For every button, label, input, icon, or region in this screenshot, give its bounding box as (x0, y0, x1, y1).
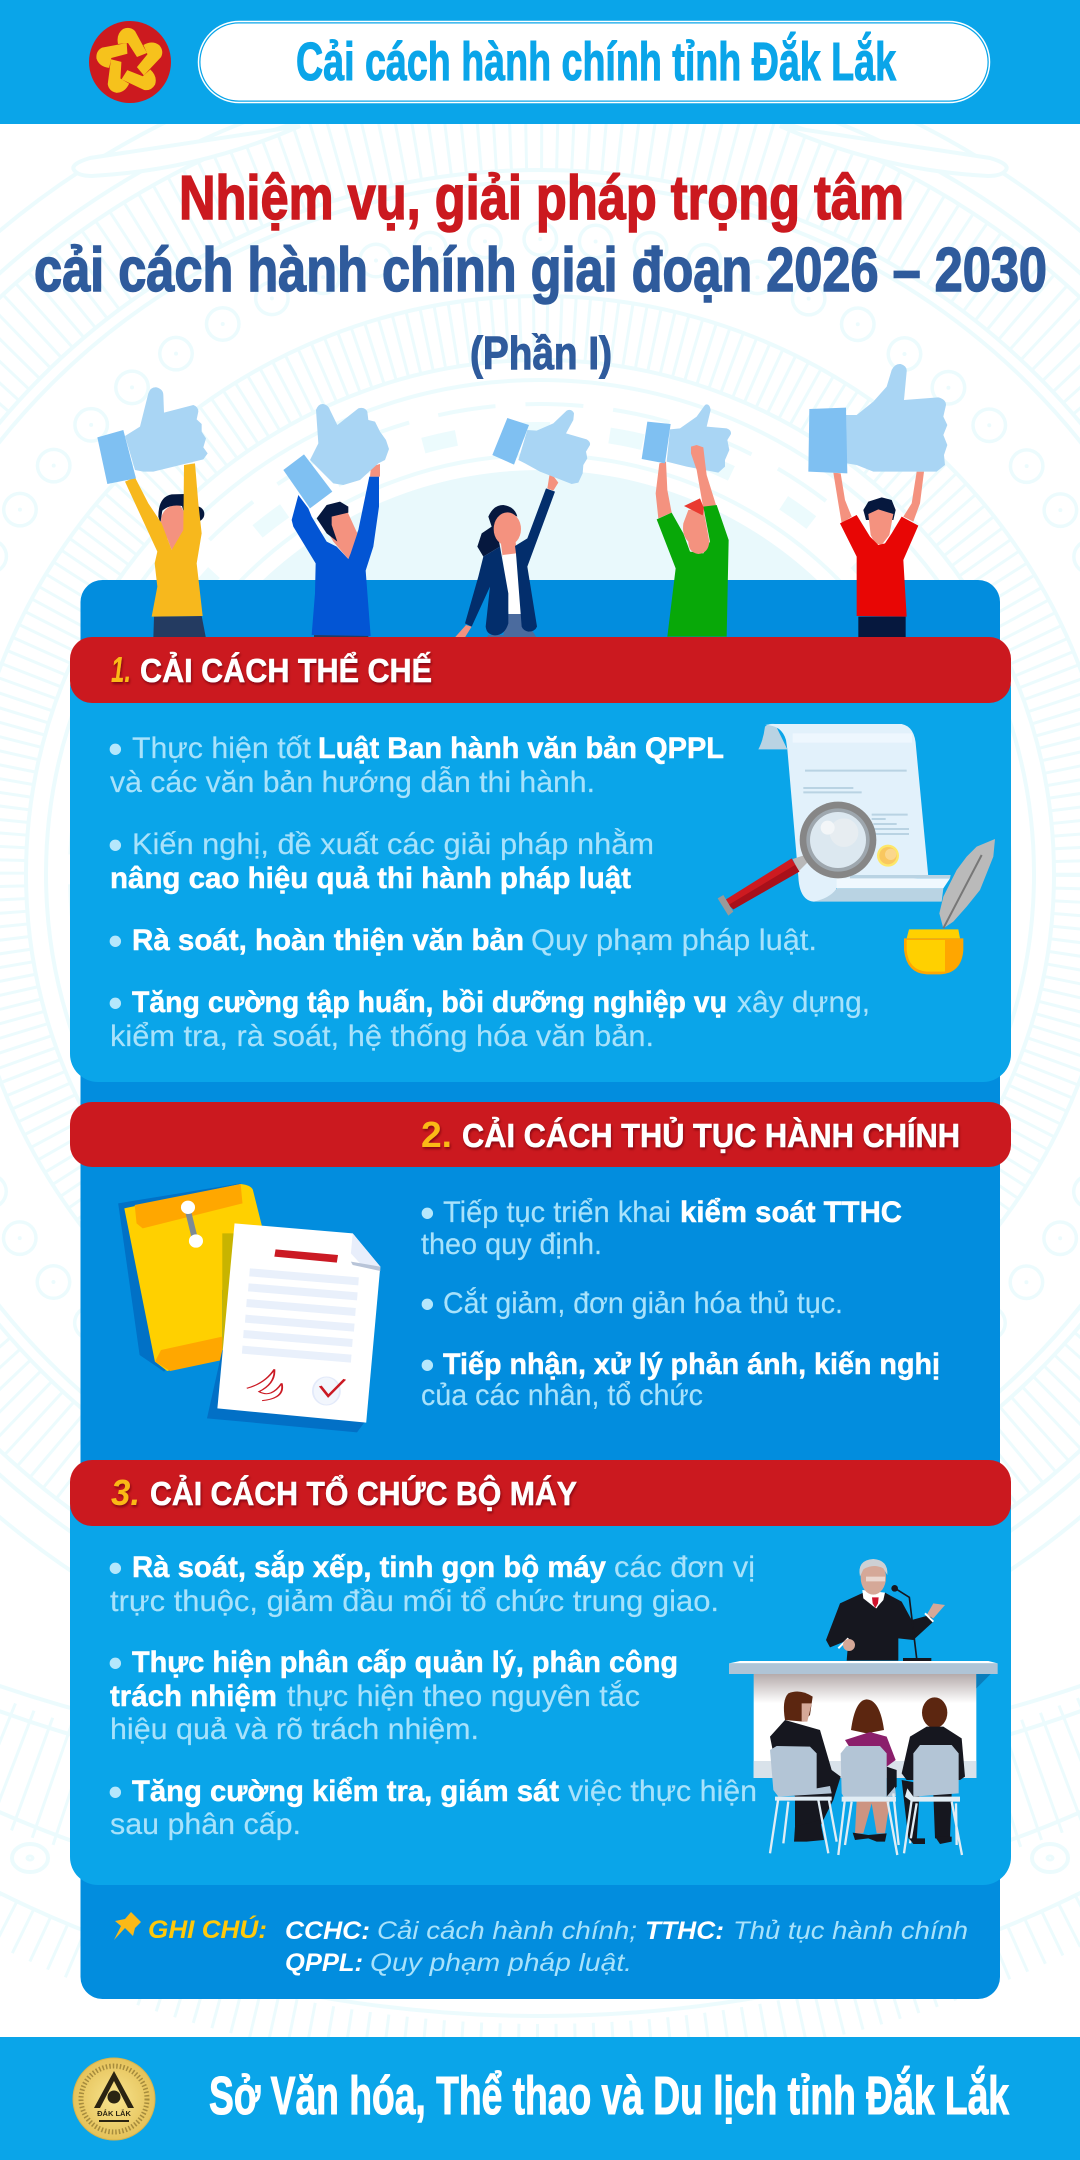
section 1 text: nâng cao hiệu quả thi hành pháp luật (110, 862, 631, 895)
panel: section 3 (70, 1460, 1011, 1885)
section 1 text: • (108, 821, 123, 868)
section 2 text: • (420, 1189, 435, 1236)
note text: Quy phạm pháp luật. (370, 1949, 632, 1977)
note text: Thủ tục hành chính (733, 1917, 968, 1945)
section 2 text: theo quy định. (421, 1228, 602, 1261)
section 3 heading: 3. (111, 1472, 140, 1513)
icon: envelope and signed document (118, 1183, 380, 1432)
header pill (198, 22, 990, 102)
section 2 heading: CẢI CÁCH THỦ TỤC HÀNH CHÍNH (462, 1117, 960, 1154)
icon: Dak Lak tourism seal (73, 2058, 155, 2140)
section 1 card background (70, 660, 1011, 1082)
section 3 text: • (108, 1639, 123, 1686)
section 1 text: xây dựng, (737, 986, 870, 1019)
section 2 text: • (420, 1341, 435, 1388)
note text (285, 1917, 968, 1977)
section 3 text: Tăng cường kiểm tra, giám sát (132, 1775, 559, 1808)
section 1 text: và các văn bản hướng dẫn thi hành. (110, 766, 595, 799)
section 3 text: trực thuộc, giảm đầu mối tổ chức trung giao. (110, 1585, 719, 1618)
note text: TTHC: (645, 1917, 724, 1945)
icon: speaker at podium and seated audience (729, 1559, 998, 1855)
section 3 text: Thực hiện phân cấp quản lý, phân công (132, 1646, 678, 1679)
section 1 text: Quy phạm pháp luật. (531, 924, 817, 957)
section 1 text: Rà soát, hoàn thiện văn bản (132, 924, 524, 957)
section 3 text: Rà soát, sắp xếp, tinh gọn bộ máy (132, 1550, 606, 1584)
section 2 text: của các nhân, tổ chức (421, 1379, 703, 1412)
section 1 text (108, 725, 870, 1053)
section 1 heading: CẢI CÁCH THỂ CHẾ (140, 652, 432, 689)
section 1 text: Thực hiện tốt (132, 732, 312, 765)
person 1: yellow sweater (97, 387, 208, 638)
person 2: blue jacket (283, 404, 389, 638)
section 1 text: • (108, 725, 123, 772)
section 3 text (108, 1544, 757, 1841)
main blue panel (80, 580, 1000, 1999)
section 3 text: trách nhiệm (110, 1680, 277, 1713)
section 2 text: Tiếp tục triển khai (443, 1196, 671, 1229)
note label: GHI CHÚ: (148, 1915, 267, 1944)
audience member 2 (838, 1699, 899, 1855)
person 5: red t-shirt (808, 364, 947, 638)
section 1 text: • (108, 917, 123, 964)
section 3 text: • (108, 1544, 123, 1591)
header bar (0, 0, 1080, 124)
note text: QPPL: (285, 1949, 363, 1977)
section 1 text: • (108, 979, 123, 1026)
section 1 text: Kiến nghị, đề xuất các giải pháp nhằm (132, 828, 654, 861)
icon: pushpin (114, 1912, 141, 1940)
person 4: green shirt (642, 404, 731, 637)
person 3: navy blazer (455, 410, 590, 638)
note block (114, 1912, 968, 1977)
panel: section 2 (70, 1102, 1011, 1432)
section 3 heading: CẢI CÁCH TỔ CHỨC BỘ MÁY (150, 1474, 577, 1512)
title (34, 164, 1047, 379)
section 3 text: sau phân cấp. (110, 1808, 301, 1841)
icon: provincial reform emblem (89, 21, 171, 103)
audience member 3 (902, 1697, 965, 1855)
section 3 text: các đơn vị (614, 1551, 755, 1584)
section 2 heading: 2. (421, 1114, 452, 1155)
footer bar (0, 2037, 1080, 2160)
section 3 text: việc thực hiện (568, 1775, 757, 1808)
audience member 1 (770, 1691, 841, 1853)
icon: scroll, magnifier, quill and ink pot (718, 724, 995, 974)
section 2 text: • (420, 1280, 435, 1327)
section 3 heading (70, 1460, 1011, 1526)
section 2 text: Cắt giảm, đơn giản hóa thủ tục. (443, 1287, 843, 1320)
section 2 text: Tiếp nhận, xử lý phản ánh, kiến nghị (443, 1348, 940, 1381)
panel: section 1 (70, 637, 1011, 1082)
section 2 heading (70, 1102, 1011, 1167)
section 3 text: • (108, 1768, 123, 1815)
section 1 heading: 1. (111, 649, 131, 690)
section 1 text: Luật Ban hành văn bản QPPL (318, 732, 724, 765)
title: (Phần I) (470, 327, 612, 379)
note text: CCHC: (285, 1917, 370, 1945)
section 2 text: kiểm soát TTHC (680, 1196, 902, 1229)
section 2 text (420, 1189, 940, 1412)
section 3 text: thực hiện theo nguyên tắc (287, 1680, 640, 1713)
title: Nhiệm vụ, giải pháp trọng tâm (179, 164, 904, 233)
section 3 text: hiệu quả và rõ trách nhiệm. (110, 1713, 479, 1746)
section 1 text: kiểm tra, rà soát, hệ thống hóa văn bản. (110, 1020, 654, 1053)
icon: Dak Lak tourism seal: ĐẮK LẮK (97, 2109, 131, 2118)
note text: Cải cách hành chính; (377, 1917, 637, 1945)
section 3 card background (70, 1480, 1011, 1885)
section 1 heading (70, 637, 1011, 703)
people with thumbs up (97, 364, 947, 638)
section 1 text: Tăng cường tập huấn, bồi dưỡng nghiệp vụ (132, 986, 727, 1019)
